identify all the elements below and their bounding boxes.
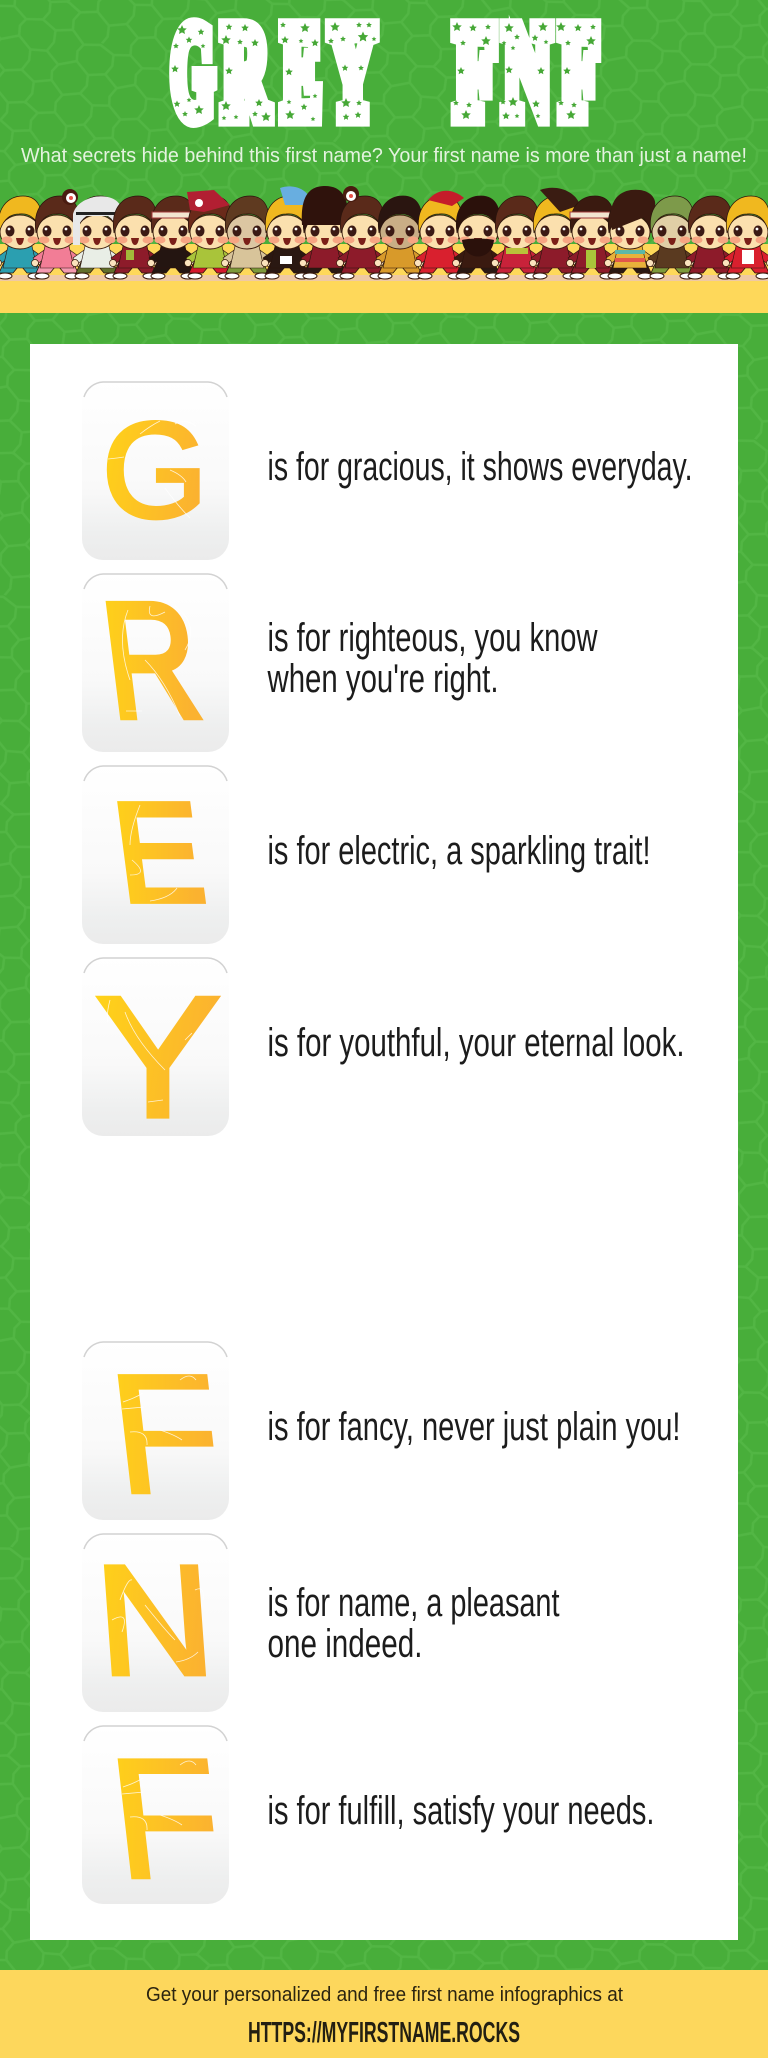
title: F — [455, 0, 497, 145]
ground line — [0, 275, 768, 281]
text: N lines: one indeed. — [268, 1622, 422, 1666]
title stars — [171, 22, 596, 121]
text: R lines: when you're right. — [267, 657, 498, 701]
tile: letter F: F — [100, 1340, 231, 1530]
tile: letter Y: Y — [96, 961, 220, 1152]
tile: letter F second: F — [100, 1723, 231, 1915]
text: N lines: is for name, a pleasant — [268, 1581, 560, 1625]
footer text: Get your personalized and free first name infographics at — [146, 1984, 623, 2006]
footer url: HTTPS://MYFIRSTNAME.ROCKS — [248, 2017, 520, 2049]
title: R — [222, 0, 270, 145]
illustration: row of cartoon children — [0, 186, 768, 279]
tile: letter G — [82, 381, 229, 560]
title: E — [282, 0, 321, 146]
text: N lines — [268, 1581, 560, 1666]
tile: letter E: E — [106, 774, 213, 931]
tile: letter R: R — [94, 569, 209, 753]
tile: letter E — [82, 765, 229, 944]
tile: letter G: G — [102, 394, 208, 546]
text: R lines — [267, 616, 598, 701]
title: G — [171, 0, 214, 146]
text: R lines: is for righteous, you know — [268, 616, 598, 660]
panel: white content card — [30, 344, 738, 1940]
footer panel — [0, 1970, 768, 2058]
yellow band — [0, 244, 768, 313]
title: N — [503, 0, 551, 145]
tile: letter N: N — [91, 1533, 219, 1708]
title: F — [560, 0, 599, 145]
subtitle: What secrets hide behind this first name? Your first name is more than just a name! — [21, 145, 747, 167]
title — [171, 0, 599, 146]
title: Y — [329, 0, 376, 145]
